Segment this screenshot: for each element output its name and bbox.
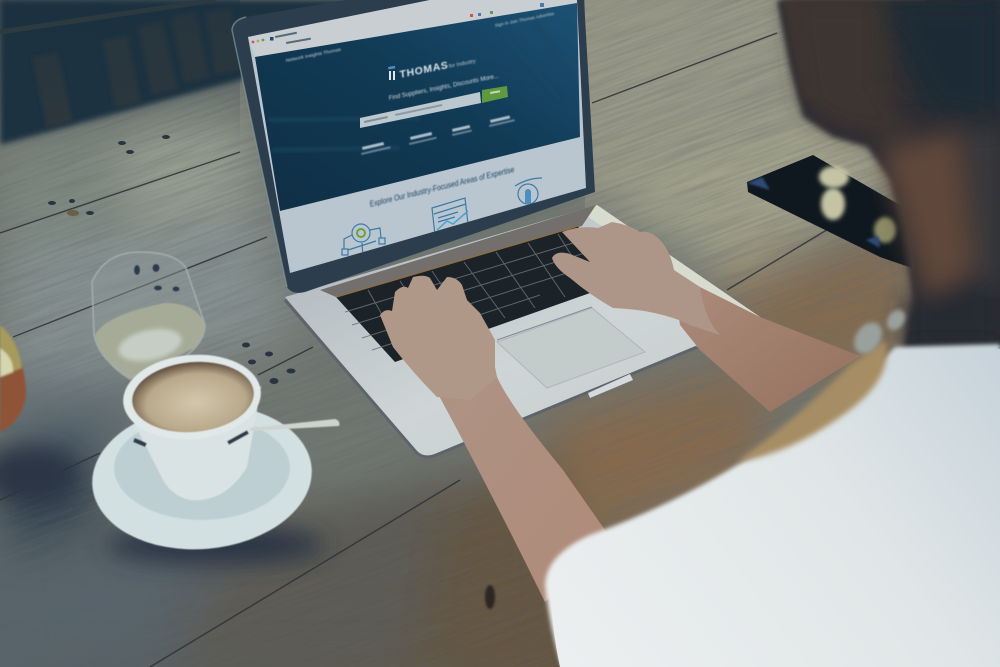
white shirt (545, 344, 1000, 667)
coffee cup (120, 349, 264, 500)
navigation text: Network Insights Thomas (286, 47, 342, 64)
trackpad (497, 308, 645, 388)
blonde hair strand (735, 340, 887, 462)
wood plank seams (0, 33, 840, 667)
site title: THOMAS (399, 60, 449, 81)
orange juice glass (0, 325, 26, 432)
logo mark (388, 66, 395, 80)
right forearm (672, 272, 860, 412)
palm rest line (497, 307, 592, 340)
left hand (380, 276, 497, 400)
spoon (250, 419, 340, 431)
screen hero blue area (255, 3, 580, 211)
laptop lid (232, 0, 595, 293)
water glass (92, 252, 205, 380)
site tagline: for Industry (449, 58, 476, 70)
browser chrome (248, 0, 577, 57)
screen white panel (248, 0, 586, 273)
shadow under cup and orange glass (0, 445, 325, 565)
green search button (482, 86, 508, 103)
right hand (552, 222, 720, 335)
lid notch (588, 374, 633, 398)
hair beads (848, 306, 909, 359)
icon: gear network (342, 224, 385, 256)
search bar (360, 92, 481, 128)
dark chairs behind the table (0, 0, 360, 150)
icon: dashboard chart (432, 198, 468, 235)
screen icons (342, 178, 542, 256)
laptop base (285, 205, 760, 457)
icon: lightbulb with person (515, 178, 542, 205)
wood knot holes (48, 135, 495, 609)
person's face and hair, out of focus (777, 0, 1000, 350)
keyboard (336, 226, 596, 362)
hero stats (361, 116, 515, 155)
hinge shadow strip (320, 205, 596, 297)
left forearm (437, 372, 612, 602)
saucer (86, 396, 318, 558)
search prompt: Find Suppliers, Insights, Discounts More... (389, 74, 499, 102)
top right links: Sign In Join Thomas Advertise (495, 11, 555, 28)
section heading: Explore Our Industry-Focused Areas of Expertise (369, 164, 515, 209)
phone (747, 155, 912, 268)
